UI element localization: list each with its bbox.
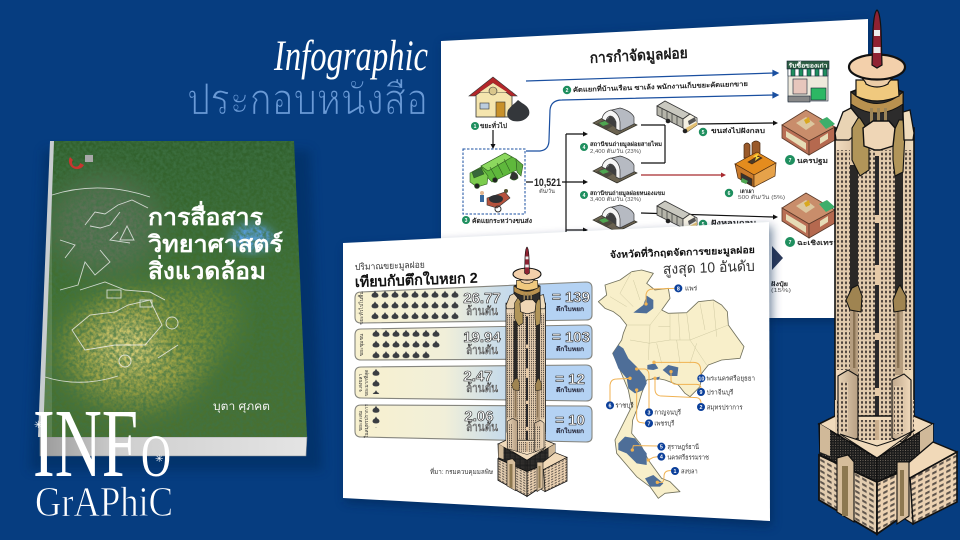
row 1: ตึกใบหยก bbox=[556, 305, 584, 313]
label: station 2: สถานีขนถ่ายมูลฝอยหนองแขม bbox=[590, 189, 665, 198]
logotype: INFO: ✳ bbox=[34, 420, 42, 431]
label: lower facility: ฝังปุ๋ย bbox=[771, 280, 789, 288]
icon: transfer station 1 bbox=[593, 108, 637, 135]
shop sign: รับซื้อของเก่า bbox=[788, 60, 828, 70]
arrow: red incinerator bbox=[641, 172, 726, 178]
row 1: 26.77 bbox=[463, 290, 501, 307]
heading: เทียบกับตึกใบหยก 2 bbox=[355, 269, 478, 291]
rank markers bbox=[606, 284, 705, 475]
label: station 2 bbox=[580, 189, 665, 203]
row 3: ขยะมากที่สุด bbox=[363, 370, 370, 396]
icon: landfill 1 bbox=[782, 110, 835, 155]
row 2: = 103 bbox=[552, 329, 590, 346]
rank numbers: 7 bbox=[648, 421, 651, 427]
highlighted provinces bbox=[613, 296, 678, 487]
icon: lower facility bbox=[772, 246, 783, 270]
publisher logo bbox=[69, 155, 93, 169]
total 10,521: ตัน/วัน bbox=[539, 188, 555, 195]
step 1 label: ขยะทั่วไป bbox=[480, 120, 507, 130]
book pages bbox=[40, 437, 307, 456]
icon: house bbox=[469, 77, 529, 121]
label: station 1: สถานีขนถ่ายมูลฝอยสายไหม bbox=[590, 140, 662, 149]
province names: เพชรบุรี bbox=[654, 420, 675, 428]
panel shadow bbox=[345, 226, 772, 526]
logotype: INFO: O bbox=[141, 423, 171, 489]
province names: นครศรีธรรมราช bbox=[667, 454, 709, 462]
logotype: INFO: INF bbox=[33, 390, 138, 498]
leader lines bbox=[610, 288, 701, 482]
icon: truck 1 bbox=[657, 101, 697, 133]
province names: แพร่ bbox=[685, 285, 698, 292]
rank numbers: 1 bbox=[674, 469, 677, 475]
rank numbers: 3 bbox=[648, 410, 651, 416]
label: step 6: 6 bbox=[728, 191, 731, 197]
small Baiyoke tower bbox=[498, 247, 567, 496]
label: step 6: เตาเผา bbox=[740, 188, 754, 195]
leader dots bbox=[628, 302, 673, 484]
step 2 label: 2 bbox=[566, 88, 569, 94]
book spine highlight bbox=[38, 141, 54, 437]
row 4: ล้านตัน bbox=[466, 420, 498, 434]
label: Nakhon Pathom: 7 bbox=[789, 158, 792, 164]
step 3 label: คัดแยกระหว่างขนส่ง bbox=[472, 217, 532, 225]
row 2: 19.94 bbox=[463, 329, 501, 346]
source note: ที่มา: กรมควบคุมมลพิษ bbox=[430, 467, 494, 476]
row 1: ขยะทั่วไปในพื้น bbox=[356, 291, 365, 325]
book title bbox=[147, 200, 284, 284]
label: step 5: ขนส่งไปฝังกลบ bbox=[711, 126, 765, 135]
step 1 label bbox=[471, 120, 507, 130]
book shadow bbox=[30, 150, 322, 470]
label: station 1: 4 bbox=[583, 145, 586, 151]
rank numbers: 5 bbox=[660, 445, 663, 451]
row 4: 2.06 bbox=[464, 408, 494, 425]
label: Chachoengsao: ฉะเชิงเทรา bbox=[797, 239, 838, 247]
map of Thailand bbox=[598, 270, 755, 498]
province names: สุราษฎร์ธานี bbox=[667, 443, 699, 451]
step 2 label bbox=[563, 78, 748, 94]
province names: พระนครศรีอยุธยา bbox=[707, 374, 755, 382]
flow lines bbox=[526, 120, 778, 232]
arrow: blue recycling bbox=[526, 93, 778, 151]
panel heading: การกำจัดมูลฝอย bbox=[589, 45, 688, 68]
row 4 bbox=[355, 404, 592, 442]
label: step 6: 500 ตัน/วัน (5%) bbox=[738, 194, 785, 201]
heading: Infographic: Infographic bbox=[273, 33, 428, 80]
icon: transfer station 2 bbox=[593, 156, 637, 183]
province names: กาญจนบุรี bbox=[654, 409, 681, 417]
total 10,521: 10,521 bbox=[534, 177, 561, 189]
rank numbers bbox=[609, 286, 704, 475]
step 3 label bbox=[462, 216, 532, 225]
label: lower facility bbox=[771, 280, 791, 294]
row 1 bbox=[355, 282, 592, 325]
province names bbox=[615, 285, 755, 475]
panel sheet bbox=[441, 19, 868, 318]
label: step 5 second bbox=[699, 219, 756, 228]
logotype: GrAPhiC: GrAPhiC bbox=[35, 480, 173, 526]
label: station 2: 4 bbox=[583, 193, 586, 199]
rank numbers: 4 bbox=[660, 455, 663, 461]
icon: incinerator bbox=[735, 141, 776, 187]
rank numbers: 2 bbox=[700, 405, 703, 411]
panel sheet bbox=[343, 222, 770, 521]
province names: สมุทรปราการ bbox=[707, 404, 743, 411]
province names: ราชบุรี bbox=[615, 402, 634, 410]
row 4: = 10 bbox=[555, 412, 585, 429]
rank numbers: 10 bbox=[698, 376, 704, 382]
label: step 6 bbox=[725, 188, 785, 201]
book title: สิ่งแวดล้อม bbox=[148, 254, 266, 284]
row 3: = 12 bbox=[555, 371, 585, 388]
label: step 5 second: 5 bbox=[702, 222, 705, 228]
icon: shop bbox=[787, 61, 829, 102]
province lines bbox=[610, 272, 728, 365]
label: station 1: 2,400 ตัน/วัน (23%) bbox=[590, 148, 641, 155]
rank numbers: 6 bbox=[609, 403, 612, 409]
large Baiyoke tower bbox=[819, 10, 957, 534]
province names: สงขลา bbox=[681, 468, 698, 475]
country outline bbox=[598, 270, 744, 498]
label: step 5 bbox=[699, 126, 765, 136]
province names: ปราจีนบุรี bbox=[707, 388, 734, 396]
panel shadow bbox=[443, 21, 870, 322]
label: Nakhon Pathom: นครปฐม bbox=[797, 157, 828, 166]
icon: green garbage truck bbox=[470, 153, 523, 188]
book author: บุตา ศุภคต bbox=[213, 401, 270, 413]
icon: recycling cart bbox=[480, 189, 510, 212]
row 4: ในสมุทรปราการ bbox=[363, 404, 370, 438]
row 4: ตึกใบหยก bbox=[556, 427, 584, 435]
map heading: จังหวัดที่วิกฤตจัดการขยะมูลฝอย bbox=[610, 242, 755, 262]
label: station 1 bbox=[580, 140, 662, 155]
row 4: ขยะสะสม bbox=[358, 411, 364, 431]
label: lower facility: (15%) bbox=[771, 288, 791, 294]
label: Nakhon Pathom bbox=[785, 155, 828, 166]
row 3: จ.สงขลา bbox=[358, 374, 364, 392]
row 3 bbox=[355, 365, 592, 401]
row 1: = 139 bbox=[552, 289, 590, 306]
label: Chachoengsao: 7 bbox=[789, 240, 792, 246]
arrow: down bbox=[490, 130, 496, 149]
book bbox=[30, 135, 322, 470]
label: station 2: 3,400 ตัน/วัน (32%) bbox=[590, 196, 641, 203]
row 3: ล้านตัน bbox=[466, 381, 498, 395]
label: step 5: 5 bbox=[702, 130, 705, 136]
book title: วิทยาศาสตร์ bbox=[147, 231, 284, 257]
map subheading: สูงสุด 10 อันดับ bbox=[663, 259, 755, 278]
row 2: ตึกใบหยก bbox=[556, 345, 584, 353]
logotype: INFO: ✳ bbox=[155, 454, 163, 465]
row 3: ตึกใบหยก bbox=[556, 386, 584, 394]
icon: transfer station 3 bbox=[593, 205, 637, 232]
label: Chachoengsao bbox=[785, 237, 838, 247]
total 10,521 bbox=[533, 176, 562, 195]
book cover bbox=[44, 141, 307, 437]
step 1 label: 1 bbox=[474, 124, 477, 130]
rank numbers: 9 bbox=[700, 390, 703, 396]
icon: truck 2 bbox=[657, 201, 697, 233]
book title: การสื่อสาร bbox=[148, 200, 264, 230]
icon: landfill 2 bbox=[782, 193, 835, 238]
subtitle: ปริมาณขยะมูลฝอย bbox=[355, 260, 425, 273]
panel: waste disposal bbox=[441, 19, 870, 322]
row 2: ล้านตัน bbox=[466, 343, 498, 357]
label: step 5 second: ฝังหลุมกลบ bbox=[711, 219, 756, 227]
row 2 bbox=[355, 325, 592, 360]
step 2 label: คัดแยกที่บ้านเรือน ซาเล้ง พนักงานเก็บขยะคัดแยกขาย bbox=[573, 78, 748, 94]
row 3: 2.47 bbox=[463, 368, 493, 385]
heading: ประกอบหนังสือ: ประกอบหนังสือ bbox=[187, 76, 428, 123]
arrow: blue top bbox=[526, 71, 778, 81]
step 3 label: 3 bbox=[465, 218, 468, 224]
row 2: ขยะชุมชน bbox=[359, 333, 365, 356]
world map line art bbox=[45, 188, 178, 382]
row 1: ล้านตัน bbox=[466, 304, 498, 318]
dashed box bbox=[463, 149, 525, 214]
panel: waste compared to Baiyoke bbox=[343, 222, 772, 526]
rank numbers: 8 bbox=[677, 286, 680, 292]
